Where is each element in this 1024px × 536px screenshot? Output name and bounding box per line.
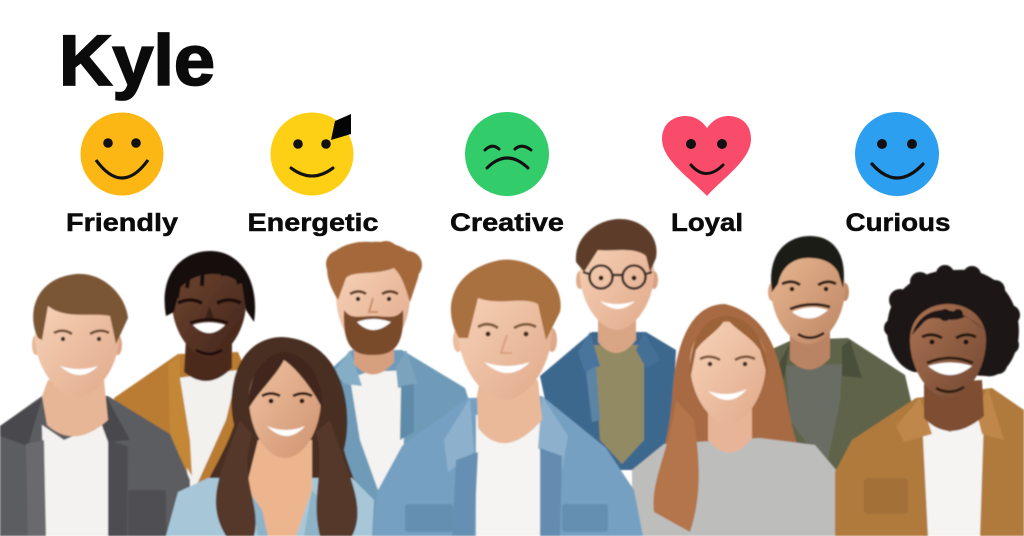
person: man with glasses, navy denim shirt and olive tee [540,219,676,470]
person: young man in centre, denim shirt and white tee [372,260,643,536]
person: man with fade, olive jacket and grey tee [768,236,912,470]
label: Friendly: Friendly [66,209,178,237]
person: man with curly hair, tan shirt and white tee [835,265,1024,536]
trait: Friendly [66,112,178,237]
trait: Energetic [248,112,379,237]
title: Kyle [59,22,215,101]
icon: yellow smiley with black flag [270,112,354,196]
person: bearded man, light denim shirt [326,241,472,536]
person: woman with long auburn hair, grey tee [632,304,848,536]
icon: blue smiley [855,112,939,196]
label: Curious: Curious [846,209,950,237]
label: Loyal: Loyal [671,209,743,237]
label: Energetic: Energetic [248,209,379,237]
icon: orange smiley [80,112,164,196]
trait: Loyal [662,116,751,237]
icon: green frowning face [465,112,549,196]
trait: Creative [450,112,564,237]
group photo of nine people [0,219,1024,536]
person: smiling man, charcoal overshirt and white tee [0,274,190,536]
label: Creative: Creative [450,209,564,237]
icon: pink heart face [662,116,751,196]
trait: Curious [846,112,950,237]
person: man with dreadlocks, mustard shirt [114,251,255,536]
person: woman with long dark wavy hair, pale denim shirt [166,337,374,536]
